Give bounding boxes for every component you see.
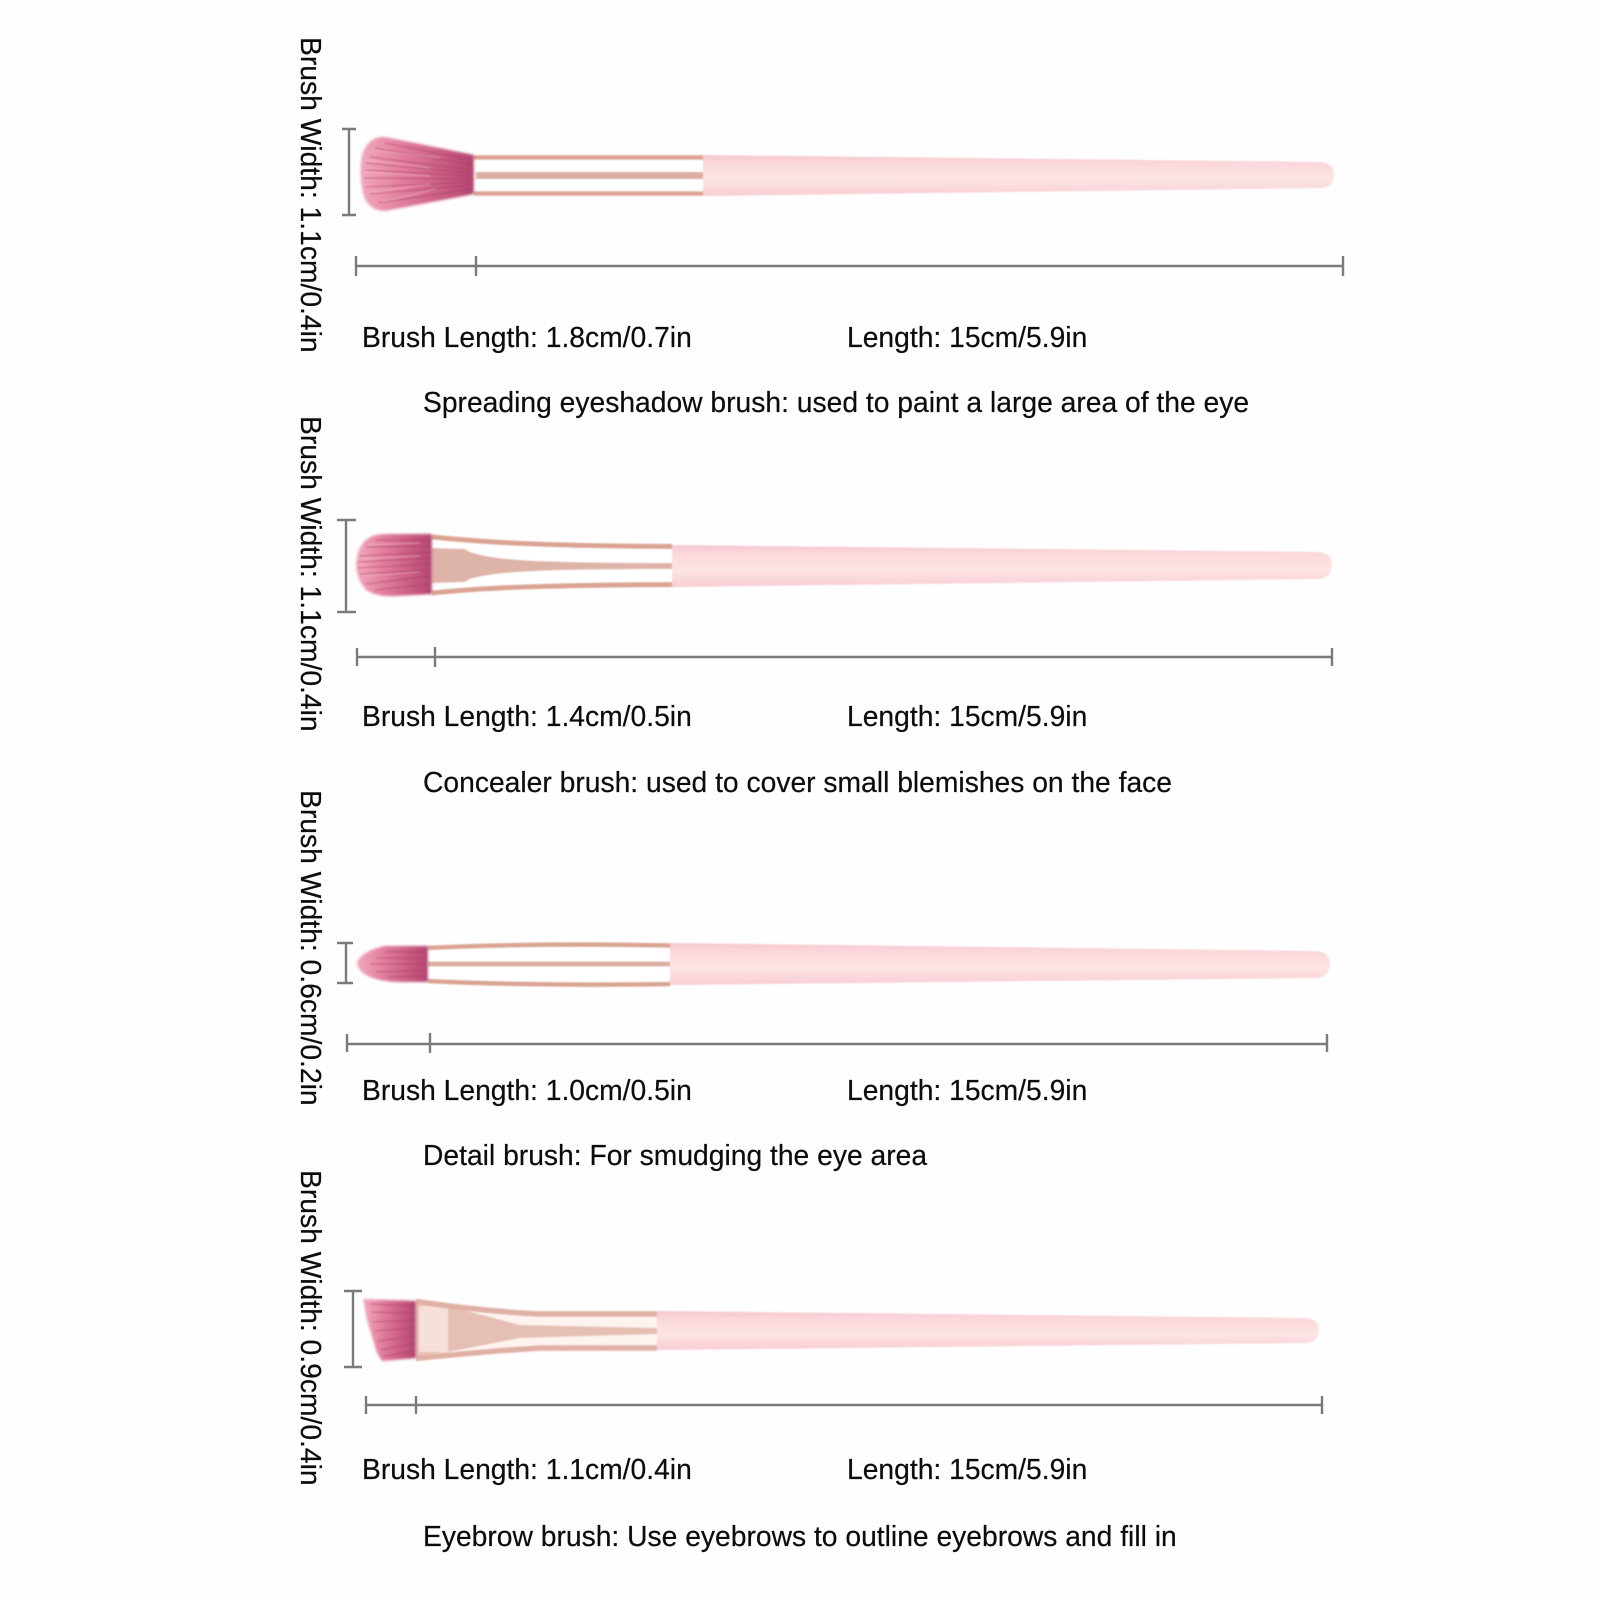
label: brush width 4: Brush Width: 0.9cm/0.4in — [295, 1170, 327, 1486]
brush illustration 4 — [363, 1299, 1319, 1361]
label: length 1: Length: 15cm/5.9in — [847, 321, 1087, 353]
label: brush width 2: Brush Width: 1.1cm/0.4in — [295, 416, 327, 732]
caption 4: Eyebrow brush: Use eyebrows to outline eyebrows and fill in — [423, 1520, 1177, 1552]
caption 1: Spreading eyeshadow brush: used to paint a large area of the eye — [423, 386, 1249, 418]
width bracket 3 — [337, 943, 353, 983]
label: brush length 3: Brush Length: 1.0cm/0.5in — [362, 1074, 692, 1106]
width bracket 2 — [337, 520, 356, 612]
brush illustration 2 — [356, 534, 1332, 596]
label: length 3: Length: 15cm/5.9in — [847, 1074, 1087, 1106]
width bracket 4 — [344, 1291, 362, 1367]
label: brush length 1: Brush Length: 1.8cm/0.7in — [362, 321, 692, 353]
label: brush width 1: Brush Width: 1.1cm/0.4in — [295, 37, 327, 353]
caption 3: Detail brush: For smudging the eye area — [423, 1139, 927, 1171]
label: length 2: Length: 15cm/5.9in — [847, 700, 1087, 732]
label: brush length 4: Brush Length: 1.1cm/0.4in — [362, 1453, 692, 1485]
width bracket 1 — [342, 129, 356, 215]
panel: detail brush — [295, 790, 1330, 1171]
panel: eyebrow brush — [295, 1170, 1322, 1552]
panel: spreading eyeshadow brush — [295, 37, 1343, 418]
length ruler 3 — [347, 1033, 1327, 1053]
length ruler 2 — [357, 647, 1332, 667]
length ruler 4 — [366, 1396, 1322, 1414]
panel: concealer brush — [295, 416, 1332, 798]
label: brush width 3: Brush Width: 0.6cm/0.2in — [295, 790, 327, 1106]
label: length 4: Length: 15cm/5.9in — [847, 1453, 1087, 1485]
length ruler 1 — [356, 256, 1343, 276]
caption 2: Concealer brush: used to cover small blemishes on the face — [423, 766, 1172, 798]
brush illustration 3 — [357, 943, 1330, 985]
label: brush length 2: Brush Length: 1.4cm/0.5in — [362, 700, 692, 732]
brush illustration 1 — [360, 137, 1334, 211]
